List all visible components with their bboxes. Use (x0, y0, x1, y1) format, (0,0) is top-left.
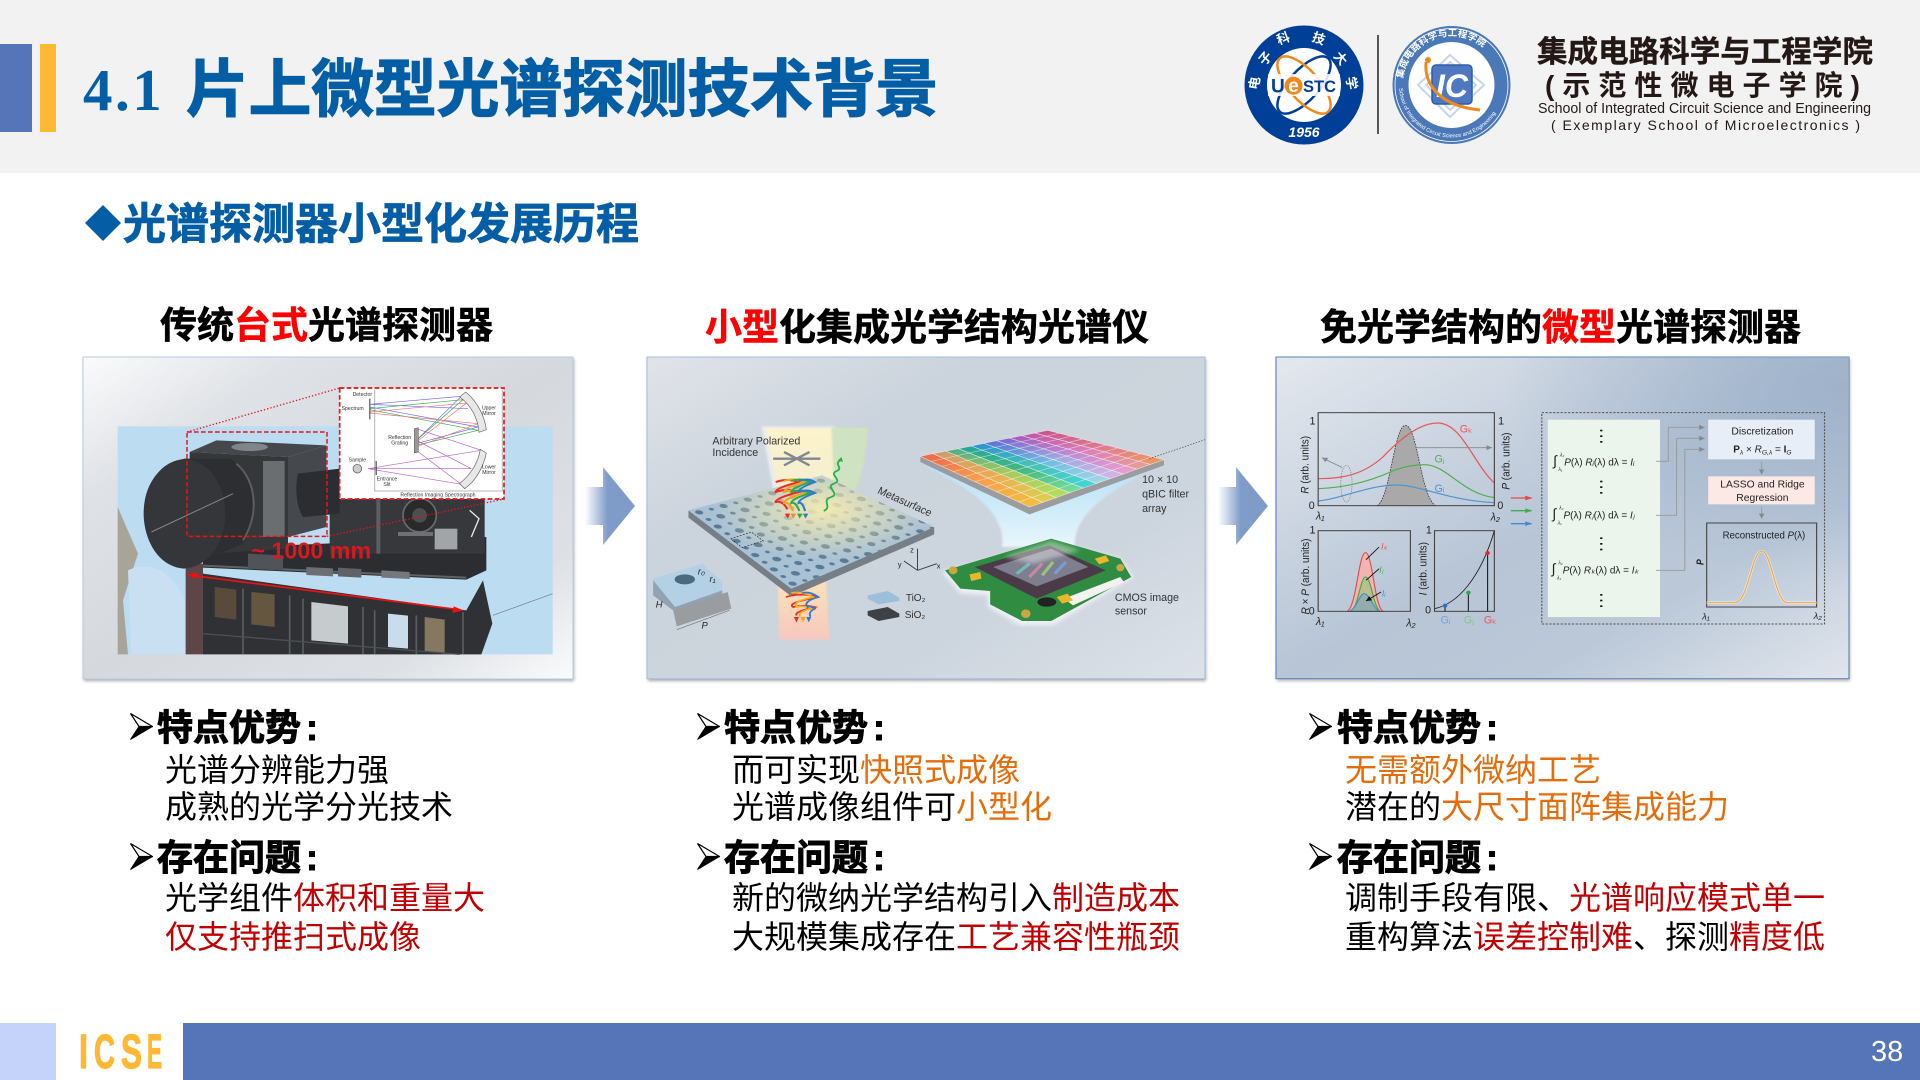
chart: reflectance curves and spectrum: λ₂ (1490, 511, 1500, 523)
text: advantages line 2: 成熟的光学分光技术 (165, 789, 453, 825)
chart: reflectance curves and spectrum (1299, 413, 1513, 523)
icon: bullet arrowhead (130, 843, 153, 870)
column heading 2: 小型化集成光学结构光谱仪 (705, 307, 1149, 348)
label: filter array: 10 × 10 (1142, 474, 1178, 486)
chart: reflectance curves and spectrum: 0 (1309, 500, 1315, 512)
column 1 text (130, 707, 485, 955)
chart: R times P peaks: λ₁ (1315, 616, 1325, 628)
box: discretization: Discretization (1731, 426, 1794, 437)
text: problems line 2: 大规模集成存在工艺兼容性瓶颈 (732, 919, 1180, 955)
upper platform (203, 537, 486, 580)
logo: UESTC: 大 (1331, 49, 1351, 68)
inset: reflection imaging spectrograph diagram (340, 388, 504, 499)
inset: reflection imaging spectrograph diagram: Spectrum (342, 406, 364, 412)
heading: advantages: 特点优势: (157, 707, 318, 748)
title: 4.1 (83, 57, 164, 123)
panel: optics-free micro spectrometer charts (1276, 357, 1849, 679)
label: approximately 1000 mm: ~ 1000 mm (251, 538, 371, 564)
callout: zoom region with dotted leaders (187, 388, 504, 536)
icon: bullet arrowhead (1309, 843, 1332, 870)
chart: reflectance curves and spectrum: 1 (1498, 415, 1504, 427)
chart: reflectance curves and spectrum: 1 (1310, 415, 1316, 427)
panel: integral equations (1548, 420, 1660, 617)
inset: reflection imaging spectrograph diagram: Mirror (482, 411, 496, 417)
lower frame (203, 574, 492, 654)
inset: reflection imaging spectrograph diagram: Grating (391, 440, 408, 446)
axes: y (897, 560, 901, 569)
light cone between filter array and sensor (924, 465, 1160, 547)
logo: UESTC: 1956 (1288, 124, 1320, 140)
chart: R times P peaks: Iᵢ (1382, 588, 1386, 598)
column heading 1: 传统台式光谱探测器 (160, 305, 493, 346)
text: advantages: 无需额外微纳工艺 (1345, 752, 1601, 788)
school name text block: 集成电路科学与工程学院 (1537, 36, 1873, 69)
lens cylinder (144, 459, 255, 569)
chart: intensity versus gauge (1417, 525, 1497, 627)
logo: UESTC: e (1288, 76, 1299, 97)
title: 片上微型光谱探测技术背景 (186, 55, 938, 125)
logo: UESTC: 电 (1246, 75, 1263, 91)
legend: TiO2 and SiO2: SiO₂ (904, 610, 925, 621)
logo: UESTC: STC (1303, 77, 1336, 96)
inset: reflection imaging spectrograph diagram: Mirror (482, 470, 496, 476)
box: LASSO and Ridge regression: LASSO and Ridge (1720, 480, 1805, 491)
box: discretization: P (1733, 444, 1740, 455)
wave arrowheads (784, 457, 842, 622)
chart: R times P peaks: R × P (arb. units) (1300, 539, 1312, 614)
column 3 text (1309, 707, 1825, 955)
section heading: 光谱探测器小型化发展历程 (123, 201, 639, 249)
box: LASSO and Ridge regression: Regression (1736, 493, 1789, 504)
chart: reconstructed spectrum: λ₁ (1701, 612, 1710, 622)
main box (190, 440, 326, 457)
unit cell detail: r₀ (697, 566, 705, 576)
panel: integral equations: ∫P(λ) Rᵢ(λ) dλ = Iᵢ (1552, 452, 1635, 468)
chart: intensity versus gauge: 0 (1425, 605, 1431, 617)
icon: polarization star (773, 452, 820, 465)
icon: bullet arrowhead (130, 713, 153, 740)
accent bar: orange (40, 44, 56, 132)
chart: reflectance curves and spectrum: 0 (1497, 500, 1503, 512)
logo: school of IC (1392, 26, 1510, 144)
inset: reflection imaging spectrograph diagram: Reflection (388, 435, 411, 441)
chart: R times P peaks (1300, 525, 1416, 629)
heading: problems: 存在问题: (1337, 837, 1498, 878)
label: arbitrary polarized incidence: Arbitrary Polarized (712, 435, 800, 447)
chart: reconstructed spectrum: Reconstructed P(λ) (1723, 531, 1805, 542)
unit cell detail (653, 564, 731, 631)
logo: school of IC: School of Integrated Circuit Science and Engineering (1399, 88, 1496, 138)
chart: intensity versus gauge: Gᵢ (1441, 615, 1451, 627)
CMOS sensor board (942, 539, 1133, 625)
text: problems: 调制手段有限、光谱响应模式单一 (1345, 880, 1825, 916)
school name text block: (示范性微电子学院) (1545, 70, 1860, 101)
label: filter array: array (1142, 503, 1167, 515)
incident wave traces (775, 460, 840, 617)
inset: reflection imaging spectrograph diagram: Entrance (377, 477, 397, 483)
chart: R times P peaks: 0 (1309, 605, 1315, 617)
chart: intensity versus gauge: Gₖ (1484, 615, 1497, 627)
logo: UESTC: 技 (1310, 29, 1328, 48)
school name text block: ( Exemplary School of Microelectronics ) (1551, 117, 1860, 133)
heading: advantages: 特点优势: (1337, 707, 1498, 748)
label: filter array (1142, 474, 1189, 515)
inset: reflection imaging spectrograph diagram: Detector (353, 392, 372, 398)
legend: TiO2 and SiO2: TiO₂ (905, 593, 925, 604)
chart: reflectance curves and spectrum: Gⱼ (1434, 454, 1445, 466)
chart: reflectance curves and spectrum: P (arb. units) (1500, 432, 1513, 490)
chart: intensity versus gauge: I (arb. units) (1417, 542, 1430, 595)
chart: R times P peaks: λ₂ (1405, 617, 1416, 629)
panel: integral equations: λ₁ (1556, 575, 1561, 581)
text: problems: 光学组件体积和重量大 (165, 880, 485, 916)
icon: bullet arrowhead (697, 713, 720, 740)
label: filter array: qBIC filter (1142, 488, 1189, 500)
icon: bullet arrowhead (697, 843, 720, 870)
light beams through metasurface (761, 426, 867, 640)
unit cell detail: H (655, 600, 662, 610)
arrow: panel 1 to panel 2 (586, 467, 635, 545)
panel: integral equations: λ₁ (1557, 520, 1562, 526)
dashed reconstruction frame (1542, 413, 1825, 624)
chart: R times P peaks: Iⱼ (1379, 565, 1385, 575)
column heading 3: 免光学结构的微型光谱探测器 (1320, 307, 1801, 348)
panel: integral equations: λ₂ (1558, 506, 1564, 512)
panel: integral equations: λ₂ (1557, 561, 1563, 567)
heading: problems: 存在问题: (724, 837, 885, 878)
text: advantages: 光谱分辨能力强 (165, 752, 389, 788)
axes: z (910, 545, 914, 554)
logo: school of IC: IC (1436, 68, 1469, 104)
legend: TiO2 and SiO2 (867, 591, 925, 621)
column 2 text (697, 707, 1180, 955)
arrow: panel 2 to panel 3 (1220, 467, 1268, 545)
inset: reflection imaging spectrograph diagram: Upper (482, 406, 496, 412)
text: problems: 新的微纳光学结构引入制造成本 (732, 880, 1180, 916)
chart: R times P peaks: Iₖ (1381, 542, 1389, 552)
logo: UESTC: 学 (1343, 75, 1360, 91)
panel: miniaturized integrated optics spectrometer (646, 357, 1204, 679)
text: problems line 2: 仅支持推扫式成像 (165, 919, 421, 955)
box: discretization: = (1772, 444, 1784, 455)
box: discretization: × (1743, 444, 1755, 455)
panel: traditional benchtop spectrometer photo (83, 357, 573, 679)
icon: bullet arrowhead (1309, 713, 1332, 740)
page number: 38 (1871, 1036, 1903, 1068)
logo: UESTC: U (1271, 76, 1285, 98)
footer bar (183, 1023, 1920, 1080)
footer block: light (0, 1023, 56, 1080)
arrow: length dimension (186, 572, 464, 613)
chart: reconstructed spectrum: P (1695, 558, 1706, 565)
unit cell detail: r₁ (709, 574, 715, 584)
photo: spectrometer hardware (118, 426, 553, 654)
box: discretization (1708, 420, 1815, 459)
logo divider (1377, 35, 1379, 134)
header band (0, 0, 1920, 173)
unit cell detail: P (701, 621, 708, 631)
inset: reflection imaging spectrograph diagram: Slit (383, 482, 391, 488)
logo: UESTC: 子 (1255, 49, 1275, 68)
text: advantages: 而可实现快照式成像 (732, 752, 1020, 788)
box: LASSO and Ridge regression (1708, 476, 1815, 504)
axes (897, 545, 940, 571)
box: discretization: R (1755, 444, 1762, 455)
box: discretization: G (1786, 449, 1792, 456)
school name text block (1537, 36, 1873, 133)
box: discretization: G,λ (1762, 449, 1772, 456)
chart: reconstructed spectrum (1695, 523, 1822, 622)
chart: reconstructed spectrum: λ₂ (1813, 611, 1822, 621)
label: arbitrary polarized incidence (712, 435, 800, 459)
chart: R times P peaks: 1 (1310, 525, 1316, 537)
logo: UESTC (1244, 26, 1364, 144)
heading: problems: 存在问题: (157, 837, 318, 878)
chart: intensity versus gauge: 1 (1426, 525, 1432, 537)
panel: integral equations: λ₂ (1559, 452, 1564, 458)
school name text block: School of Integrated Circuit Science and Engineering (1538, 100, 1871, 117)
logo: school of IC: 集成电路科学与工程学院 (1395, 28, 1487, 78)
panel: integral equations: ∫P(λ) Rₖ(λ) dλ = Iₖ (1551, 561, 1640, 577)
logo: UESTC: 科 (1274, 29, 1292, 48)
box: discretization: λ (1739, 449, 1743, 456)
accent bar: blue (0, 44, 32, 132)
connector arrows (1656, 427, 1762, 570)
footer logo text: ICSE (79, 1028, 162, 1074)
text: advantages line 2: 光谱成像组件可小型化 (732, 789, 1052, 825)
label: CMOS image sensor: sensor (1114, 606, 1147, 618)
axes: x (936, 562, 940, 571)
inset: reflection imaging spectrograph diagram: Reflection Imaging Spectrograph (400, 493, 476, 499)
box: discretization: I (1784, 444, 1787, 455)
coloured signal arrows (1511, 496, 1532, 526)
chart: reflectance curves and spectrum: λ₁ (1315, 511, 1325, 523)
chart: intensity versus gauge: Gⱼ (1464, 615, 1474, 627)
label: arbitrary polarized incidence: Incidence (712, 447, 758, 459)
chart: reflectance curves and spectrum: R (arb. units) (1299, 436, 1312, 494)
text: problems line 2: 重构算法误差控制难、探测精度低 (1345, 919, 1825, 955)
panel: integral equations: λ₁ (1557, 467, 1563, 473)
heading: advantages: 特点优势: (724, 707, 885, 748)
inset: reflection imaging spectrograph diagram: Sample (349, 458, 366, 464)
chart: reflectance curves and spectrum: Gᵢ (1434, 483, 1445, 495)
chart: reflectance curves and spectrum: Gₖ (1460, 423, 1473, 435)
label: CMOS image sensor: CMOS image (1114, 592, 1179, 604)
inset: reflection imaging spectrograph diagram: Lower (482, 465, 496, 471)
panel: integral equations: ∫P(λ) Rⱼ(λ) dλ = Iⱼ (1551, 506, 1636, 522)
text: advantages line 2: 潜在的大尺寸面阵集成能力 (1345, 789, 1729, 825)
label: metasurface: Metasurface (875, 485, 933, 519)
label: CMOS image sensor (1114, 592, 1179, 618)
filter array 10 by 10 (920, 430, 1204, 514)
metasurface plate (688, 475, 934, 596)
